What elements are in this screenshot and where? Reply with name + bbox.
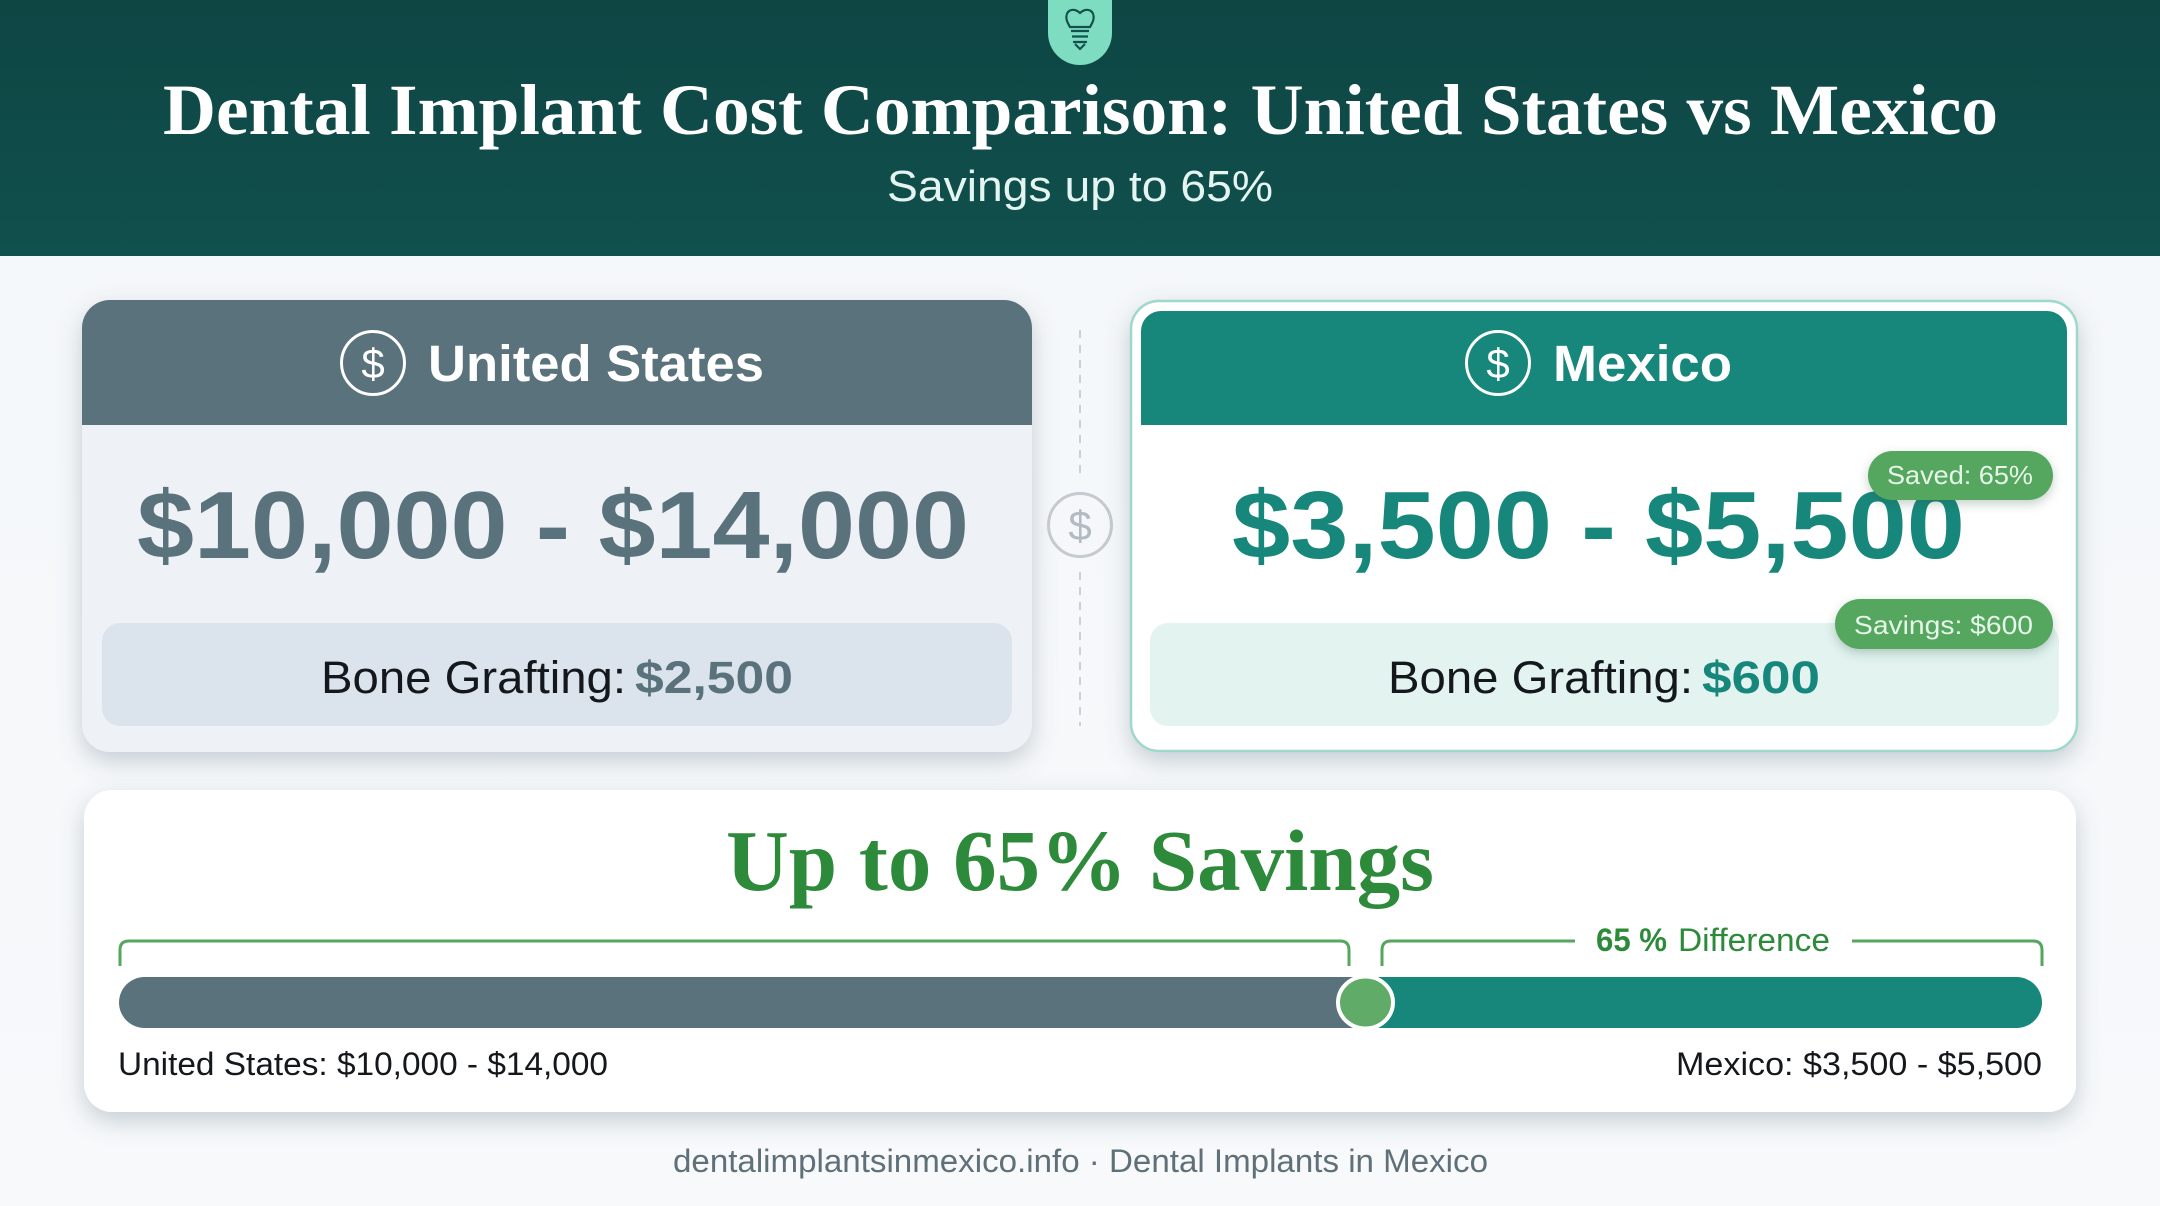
header band (0, 0, 2160, 256)
savings headline: Up to 65% Savings (726, 812, 1434, 909)
icon: dollar circle: $ (361, 340, 385, 387)
comparison bar (119, 976, 2045, 1028)
badge: Saved 65%: Saved: 65% (1887, 460, 2033, 490)
United States header bar (82, 300, 1032, 425)
bracket: difference share (1382, 941, 2042, 966)
difference label: Difference (1678, 922, 1830, 958)
icon: dollar circle: $ (1486, 340, 1510, 387)
icon: dollar circle (1466, 332, 1530, 394)
panel: savings summary (84, 790, 2076, 1112)
United States bone grafting row (102, 623, 1012, 726)
heading: United States: United States (428, 335, 764, 392)
badge: Saved 65% (1868, 451, 2053, 500)
badge: Savings $600 (1835, 599, 2053, 649)
Mexico price: $3,500 - $5,500 (1232, 472, 1965, 579)
center divider with dollar icon: $ (1068, 502, 1092, 549)
panel: Mexico (1131, 301, 2077, 751)
center divider with dollar icon (1048, 330, 1112, 726)
heading: Mexico: Mexico (1553, 335, 1732, 392)
United States price: $10,000 - $14,000 (137, 472, 969, 579)
Mexico bone grafting row: Bone Grafting: (1388, 652, 1693, 703)
United States bone grafting row: Bone Grafting: (321, 652, 626, 703)
label: United States range: United States: $10,000 - $14,000 (118, 1046, 608, 1082)
label: Mexico range: Mexico: $3,500 - $5,500 (1676, 1046, 2042, 1082)
Mexico bone grafting row: $600 (1702, 652, 1820, 703)
footer: dentalimplantsinmexico.info · Dental Implants in Mexico (673, 1143, 1488, 1179)
difference label (1596, 922, 1830, 958)
bracket: United States share (120, 941, 1349, 966)
panel: United States (82, 300, 1032, 752)
icon: dental implant badge (1048, 0, 1112, 65)
United States bone grafting row: $2,500 (635, 652, 793, 703)
title: Dental Implant Cost Comparison: United States vs Mexico (163, 70, 1998, 150)
subtitle: Savings up to 65% (887, 162, 1273, 211)
icon: dollar circle (342, 332, 404, 394)
difference label: 65 % (1596, 922, 1667, 958)
Mexico header bar (1141, 311, 2067, 425)
badge: Savings $600: Savings: $600 (1854, 610, 2033, 640)
Mexico bone grafting row (1150, 623, 2059, 726)
bar marker (1338, 976, 1393, 1028)
